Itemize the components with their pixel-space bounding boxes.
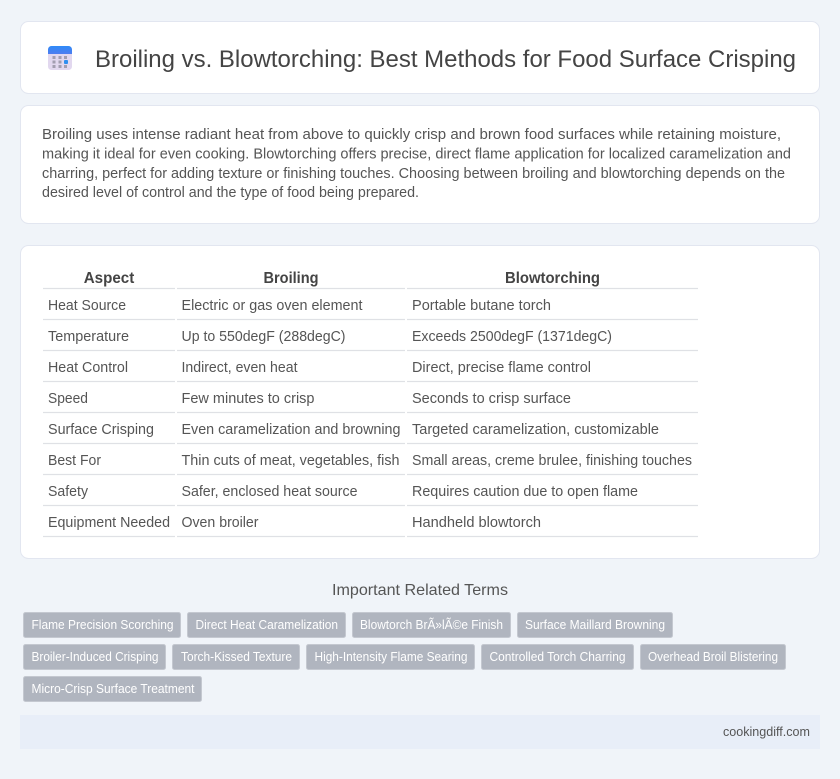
row: heat control: Direct, precise flame control [412,360,591,376]
table header row: Broiling [264,270,318,287]
heading: related terms: Important Related Terms [332,582,508,599]
row: heat control: Indirect, even heat [182,360,298,376]
tag group: related terms: Broiler-Induced Crisping [32,649,158,664]
tag group: related terms: Blowtorch BrÃ»lÃ©e Finish [360,617,503,632]
row: best for: Best For [48,453,101,469]
panel: intro paragraph: charring, perfect for adding texture or finishing touches. Choosing between broiling and blowtorching depends on the [42,166,785,182]
footer bar: cookingdiff.com [723,724,810,739]
row: best for [48,453,692,469]
row: surface crisping [48,422,659,438]
row: temperature [48,329,612,345]
panel: intro paragraph: making it ideal for even cooking. Blowtorching offers precise, direct flame application for localized caramelization and [42,146,791,162]
panel: comparison table [20,246,820,558]
row: equipment needed: Oven broiler [182,515,259,531]
row: equipment needed: Equipment Needed [48,515,170,531]
row: safety: Safer, enclosed heat source [182,484,358,500]
tag group: related terms: Surface Maillard Browning [525,617,665,632]
tag group: related terms: Overhead Broil Blistering [648,649,778,664]
panel: intro paragraph [20,106,820,224]
row: heat source [48,298,551,314]
row: heat control [48,360,591,376]
row: heat control: Heat Control [48,360,128,376]
row: temperature: Temperature [48,329,129,345]
footer bar [20,715,820,749]
tag group: related terms: High-Intensity Flame Searing [314,649,468,664]
tag group: related terms: Torch-Kissed Texture [181,649,292,664]
row: heat source: Heat Source [48,298,126,314]
table header row [84,270,600,287]
row: surface crisping: Surface Crisping [48,422,154,438]
row: best for: Small areas, creme brulee, finishing touches [412,453,692,469]
tag group: related terms [24,612,786,702]
row: temperature: Up to 550degF (288degC) [182,329,346,345]
panel: header [20,22,820,94]
row: speed: Seconds to crisp surface [412,391,571,407]
row: best for: Thin cuts of meat, vegetables, fish [182,453,400,469]
tag group: related terms: Controlled Torch Charring [490,649,626,664]
row: equipment needed: Handheld blowtorch [412,515,541,531]
row: equipment needed [48,515,541,531]
row: safety: Requires caution due to open flame [412,484,638,500]
row: heat source: Electric or gas oven element [182,298,362,314]
tag group: related terms: Flame Precision Scorching [32,617,174,632]
row: speed: Speed [48,391,88,407]
row: surface crisping: Targeted caramelization, customizable [412,422,659,438]
row: safety [48,484,638,500]
row: safety: Safety [48,484,89,500]
row: surface crisping: Even caramelization and browning [182,422,400,438]
title: Broiling vs. Blowtorching: Best Methods for Food Surface Crisping [95,46,796,73]
table header row: Blowtorching [505,270,600,287]
tag group: related terms: Direct Heat Caramelization [196,617,338,632]
row: speed [48,391,571,407]
icon: calendar [48,46,72,70]
row: speed: Few minutes to crisp [182,391,314,407]
row: heat source: Portable butane torch [412,298,551,314]
table header row: Aspect [84,270,135,287]
panel: intro paragraph: desired level of control and the type of food being prepared. [42,185,419,201]
row: temperature: Exceeds 2500degF (1371degC) [412,329,612,345]
panel: intro paragraph: Broiling uses intense radiant heat from above to quickly crisp and brown food surfaces while retaining moisture, [42,127,781,143]
tag group: related terms: Micro-Crisp Surface Treatment [32,681,195,696]
